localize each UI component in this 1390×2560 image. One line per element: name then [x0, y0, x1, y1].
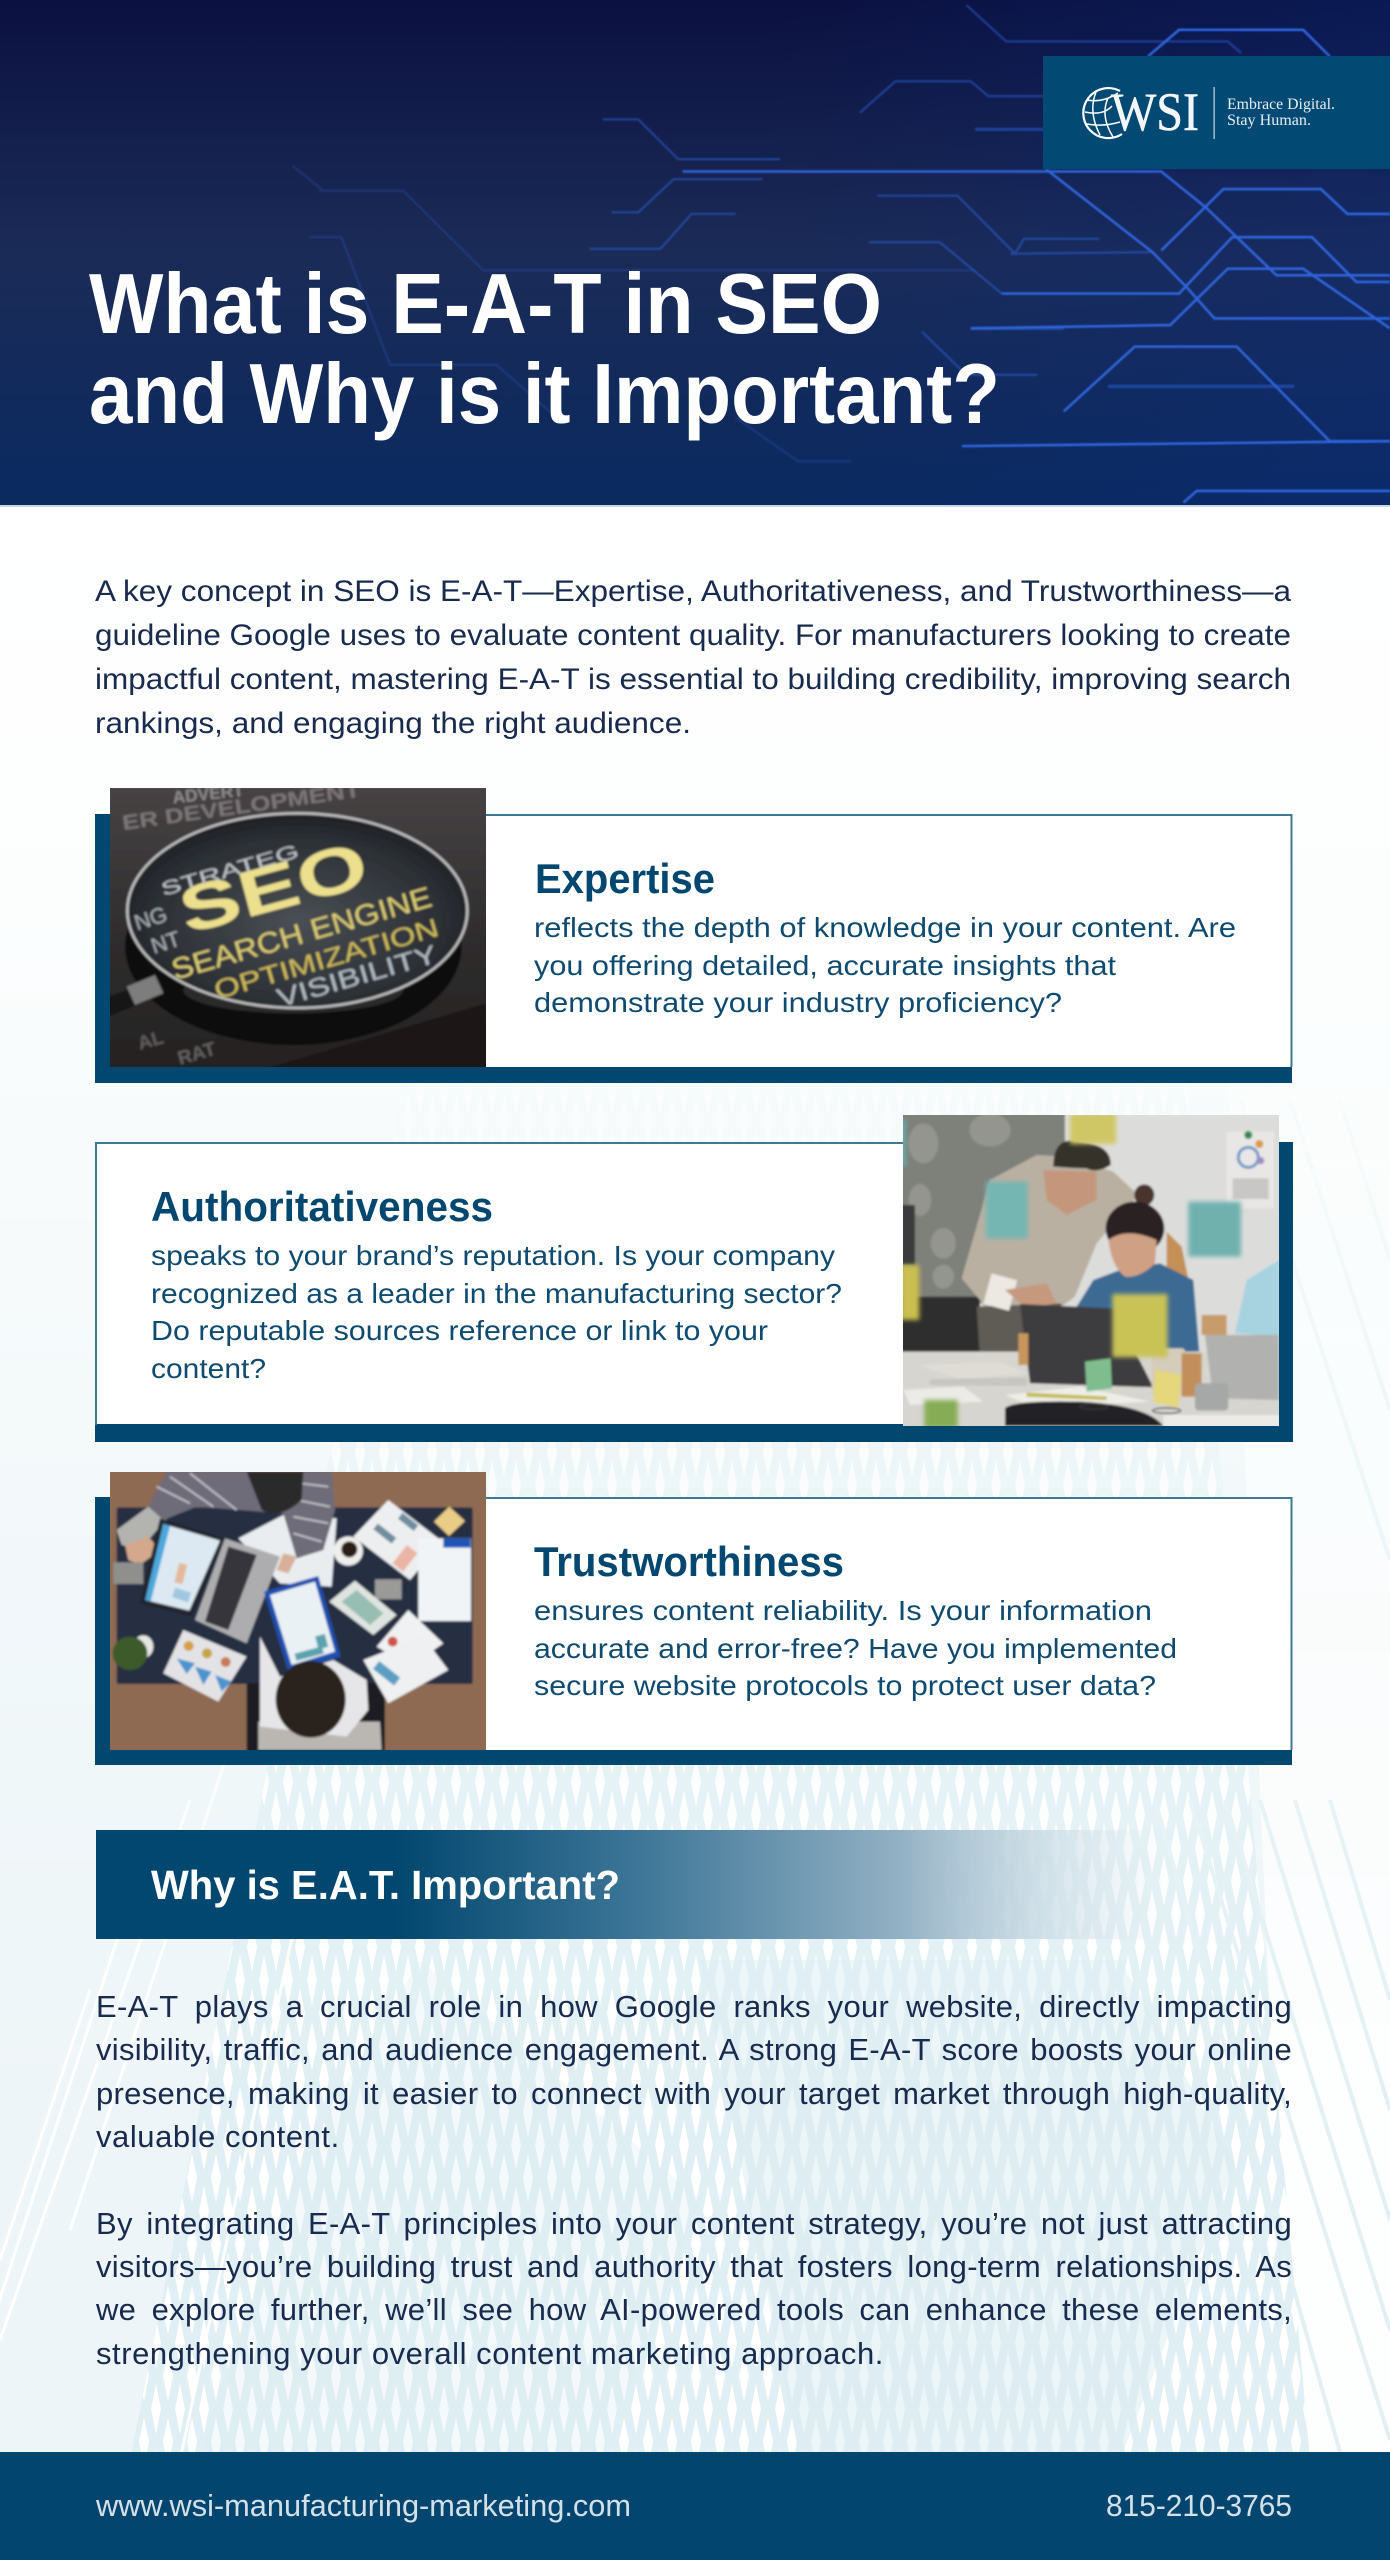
header banner with circuit background — [0, 0, 1390, 507]
text block: why paragraph 2: By integrating E-A-T principles into your content strategy, you’re not just attracting — [96, 2206, 1292, 2241]
panel backing — [95, 1497, 1292, 1765]
text: Trustworthiness body: secure website protocols to protect user data? — [534, 1670, 1156, 1701]
text block: why paragraph 1: presence, making it easier to connect with your target market through high-quality, — [96, 2076, 1292, 2111]
heading: Expertise: Expertise — [535, 855, 715, 902]
text block: why paragraph 1: visibility, traffic, and audience engagement. A strong E-A-T score boosts your online — [96, 2032, 1292, 2067]
text: Authoritativeness body: speaks to your brand’s reputation. Is your company — [151, 1240, 835, 1271]
intro paragraph: guideline Google uses to evaluate content quality. For manufacturers looking to create — [95, 619, 1291, 652]
photo: SEO magnifying glass: VISIBILITY — [273, 939, 440, 1013]
photo: SEO magnifying glass: ADVERT — [172, 780, 245, 807]
photo: overhead view of desk — [108, 1470, 488, 1752]
panel backing — [95, 1142, 1293, 1442]
section heading band: Why is E.A.T. Important? — [151, 1862, 620, 1908]
footer phone: 815-210-3765 — [1106, 2488, 1292, 2523]
title — [89, 257, 1000, 442]
intro paragraph — [95, 575, 1291, 740]
photo: SEO magnifying glass: AL — [136, 1027, 166, 1055]
logo box: WSI — [1111, 82, 1199, 142]
section heading band — [96, 1830, 1166, 1939]
page background with lattice pattern — [0, 1084, 1390, 2452]
text: Expertise body: reflects the depth of knowledge in your content. Are — [534, 912, 1236, 943]
text: Trustworthiness body: accurate and error-free? Have you implemented — [534, 1633, 1177, 1664]
text block: why paragraph 1 — [96, 1989, 1292, 2154]
text block: why paragraph 1: valuable content. — [96, 2119, 340, 2154]
text: Expertise body: demonstrate your industry proficiency? — [534, 987, 1062, 1018]
panel backing — [95, 814, 1292, 1083]
photo: SEO magnifying glass: RAT — [176, 1039, 218, 1070]
text: Authoritativeness body: recognized as a leader in the manufacturing sector? — [151, 1278, 842, 1309]
photo: SEO magnifying glass — [108, 779, 488, 1070]
text block: why paragraph 2: we explore further, we’ll see how AI-powered tools can enhance these elements, — [96, 2292, 1292, 2327]
photo: SEO magnifying glass: NG — [131, 901, 170, 935]
text: Authoritativeness body: content? — [151, 1353, 266, 1384]
text: Trustworthiness body — [534, 1595, 1177, 1701]
footer website: www.wsi-manufacturing-marketing.com — [95, 2488, 631, 2523]
text: Authoritativeness body: Do reputable sources reference or link to your — [151, 1315, 768, 1346]
intro paragraph: impactful content, mastering E-A-T is essential to building credibility, improving search — [95, 663, 1291, 696]
photo: SEO magnifying glass: OPTIMIZATION — [211, 912, 442, 1005]
heading: Authoritativeness: Authoritativeness — [151, 1183, 493, 1230]
icon: globe — [1083, 88, 1122, 138]
logo box: Embrace Digital. — [1227, 96, 1335, 113]
text block: why paragraph 2: visitors—you’re building trust and authority that fosters long-term relationships. As — [96, 2249, 1292, 2284]
text block: why paragraph 2: strengthening your overall content marketing approach. — [96, 2336, 884, 2371]
logo box — [1043, 56, 1390, 169]
photo: SEO magnifying glass: STRATEG — [159, 841, 302, 901]
photo: SEO magnifying glass: SEO — [171, 827, 375, 948]
title: What is E-A-T in SEO — [89, 257, 882, 352]
text: Expertise body: you offering detailed, accurate insights that — [534, 950, 1116, 981]
text block: why paragraph 2 — [96, 2206, 1292, 2371]
logo box: Stay Human. — [1227, 112, 1311, 129]
panel: trustworthiness — [95, 1470, 1292, 1765]
heading: Trustworthiness: Trustworthiness — [534, 1538, 844, 1585]
text block: why paragraph 1: E-A-T plays a crucial role in how Google ranks your website, directly impacting — [96, 1989, 1292, 2024]
footer bar — [0, 2452, 1390, 2560]
photo: two colleagues at laptop — [900, 1113, 1282, 1428]
intro paragraph: rankings, and engaging the right audience. — [95, 707, 691, 740]
text: Trustworthiness body: ensures content reliability. Is your information — [534, 1595, 1152, 1626]
panel: authoritativeness — [95, 1113, 1293, 1442]
intro paragraph: A key concept in SEO is E-A-T—Expertise, Authoritativeness, and Trustworthiness—a — [95, 575, 1291, 608]
photo: SEO magnifying glass: ER DEVELOPMENT — [121, 779, 362, 835]
photo: SEO magnifying glass: NT — [148, 926, 183, 959]
panel: expertise — [95, 779, 1292, 1083]
text: Authoritativeness body — [151, 1240, 842, 1384]
text: Expertise body — [534, 912, 1236, 1018]
photo: SEO magnifying glass: SEARCH ENGINE — [168, 881, 435, 987]
title: and Why is it Important? — [89, 347, 1000, 442]
